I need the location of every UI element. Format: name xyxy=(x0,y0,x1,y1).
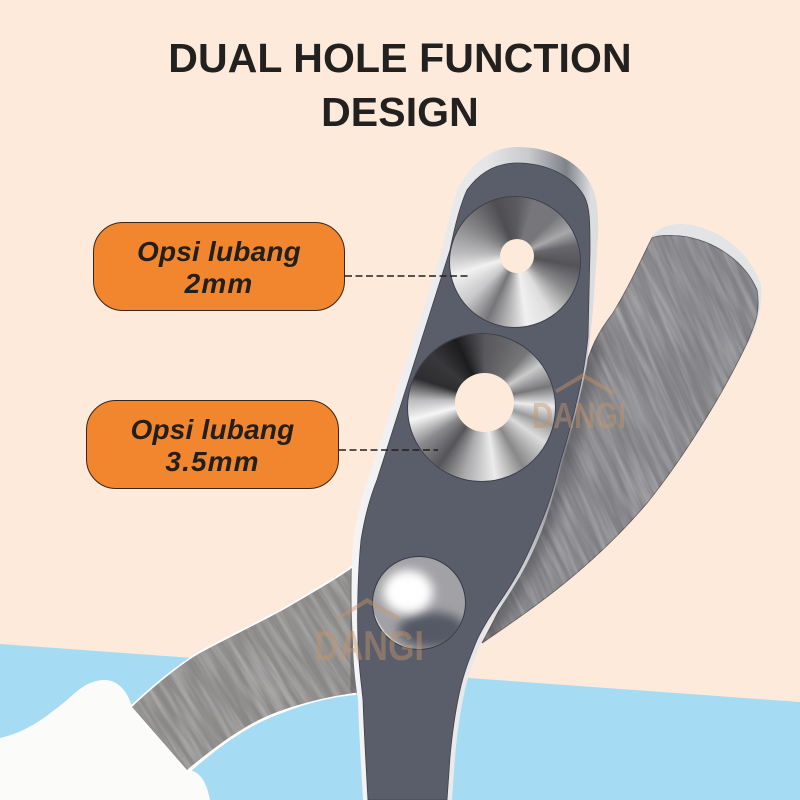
callout: 2mm hole: 2mm xyxy=(185,268,253,299)
callout: 3.5mm hole xyxy=(86,400,339,489)
watermark: lower: DANGI xyxy=(314,622,424,669)
upper-right blade xyxy=(478,224,761,645)
title xyxy=(168,35,632,135)
through hole 3.5mm xyxy=(455,373,514,432)
white handle xyxy=(0,680,210,800)
callout: 2mm hole: Opsi lubang xyxy=(137,236,301,267)
countersunk hole 2mm cone xyxy=(450,197,580,327)
through hole 2mm xyxy=(500,239,534,273)
front blade dark face xyxy=(358,163,590,800)
countersunk hole 3.5mm cone xyxy=(408,334,555,481)
lower-left blade xyxy=(130,565,362,772)
connector line: 3.5mm xyxy=(339,449,438,451)
rivet xyxy=(372,556,466,650)
callout: 3.5mm hole: Opsi lubang xyxy=(130,414,294,445)
watermark: blade: DANGI xyxy=(532,395,626,436)
callout: 2mm hole xyxy=(93,222,345,311)
callout: 3.5mm hole: 3.5mm xyxy=(165,446,260,477)
title: DESIGN xyxy=(321,89,479,135)
title: DUAL HOLE FUNCTION xyxy=(168,35,632,81)
front blade silver rim xyxy=(352,147,598,800)
connector line: 2mm xyxy=(345,275,468,277)
